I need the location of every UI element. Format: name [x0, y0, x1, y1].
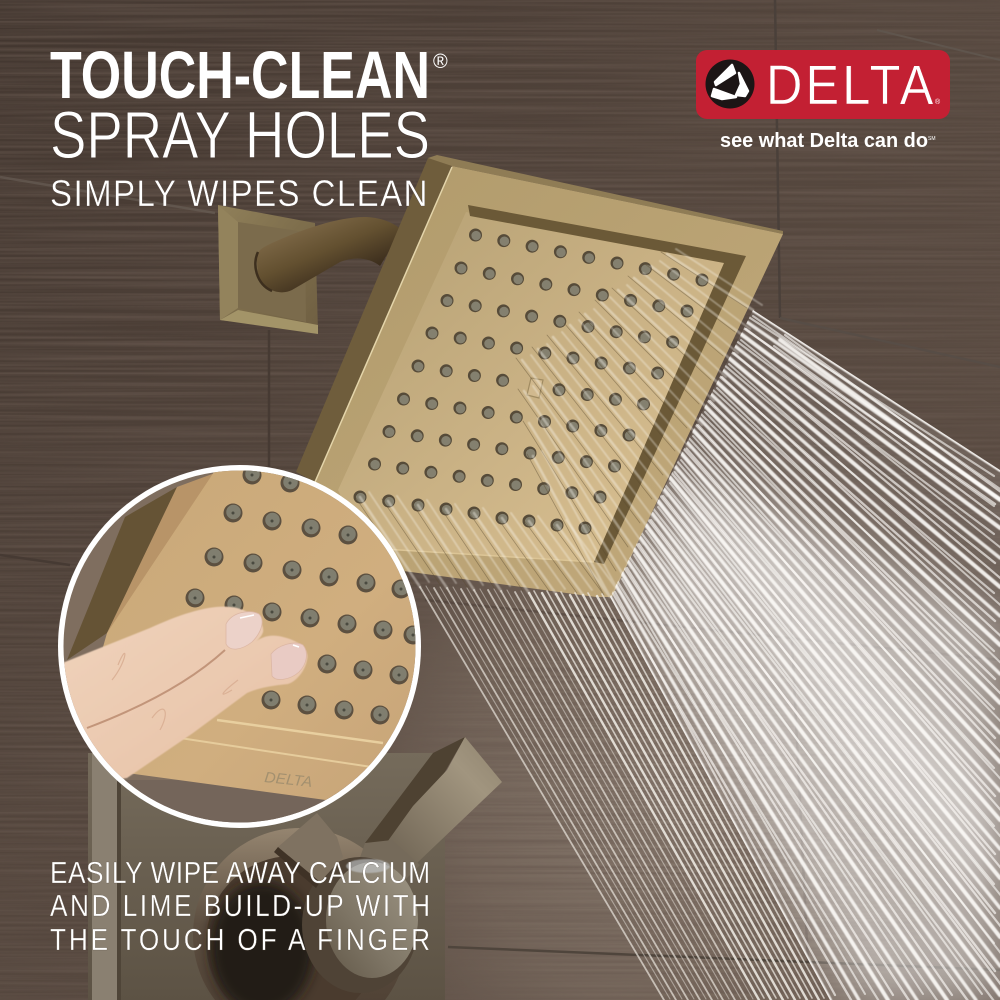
sparse outer jets [420, 586, 824, 1000]
valve trim plate [88, 753, 445, 1000]
red badge [696, 50, 950, 119]
wall escutcheon [218, 205, 318, 334]
DELTA engraving: DELTA [264, 769, 313, 791]
inset holes [195, 474, 414, 715]
dark cavity [210, 882, 314, 1000]
bottom caption: EASILY WIPE AWAY CALCIUM [50, 856, 430, 891]
subtitle: SIMPLY WIPES CLEAN [50, 173, 428, 214]
small lever [278, 813, 343, 882]
large lever [365, 737, 465, 850]
knob disc face [326, 862, 418, 978]
knuckle creases [112, 653, 238, 730]
recessed trough [468, 205, 746, 564]
shower arm [255, 217, 402, 292]
nail 1 [226, 612, 262, 649]
dense jets [604, 305, 1000, 1000]
service mark: SM [928, 136, 936, 142]
spray plate [338, 212, 726, 562]
bottom caption [50, 856, 430, 958]
bottom caption: AND LIME BUILD-UP WITH [50, 889, 430, 924]
water on plate [354, 249, 762, 597]
title line two: SPRAY HOLES [50, 98, 430, 173]
title line one: TOUCH-CLEAN [50, 38, 430, 113]
shower head [285, 155, 783, 597]
head front face [285, 166, 783, 597]
nail 2 [271, 643, 306, 679]
title [50, 38, 448, 214]
head side edge [296, 158, 452, 482]
delta emblem [706, 60, 754, 108]
fingers [64, 606, 308, 779]
bottom caption: THE TOUCH OF A FINGER [50, 923, 430, 958]
knob disc rim [302, 857, 418, 993]
registered mark: ® [433, 51, 448, 73]
spray holes [360, 235, 703, 529]
lever neck [355, 840, 420, 885]
inset plate [103, 470, 416, 800]
Delta logo [696, 50, 950, 152]
water spray [354, 249, 1000, 1000]
inset head side band [67, 487, 177, 660]
wordmark: DELTA [766, 55, 934, 117]
outer ring [193, 828, 407, 1000]
centre mark [527, 378, 543, 398]
logo registered mark: ® [935, 98, 941, 106]
magnified inset circle [40, 460, 430, 830]
head top edge [428, 155, 783, 234]
valve knob and levers [193, 737, 502, 1000]
tagline: see what Delta can do [720, 130, 928, 152]
inset wall [64, 470, 416, 822]
